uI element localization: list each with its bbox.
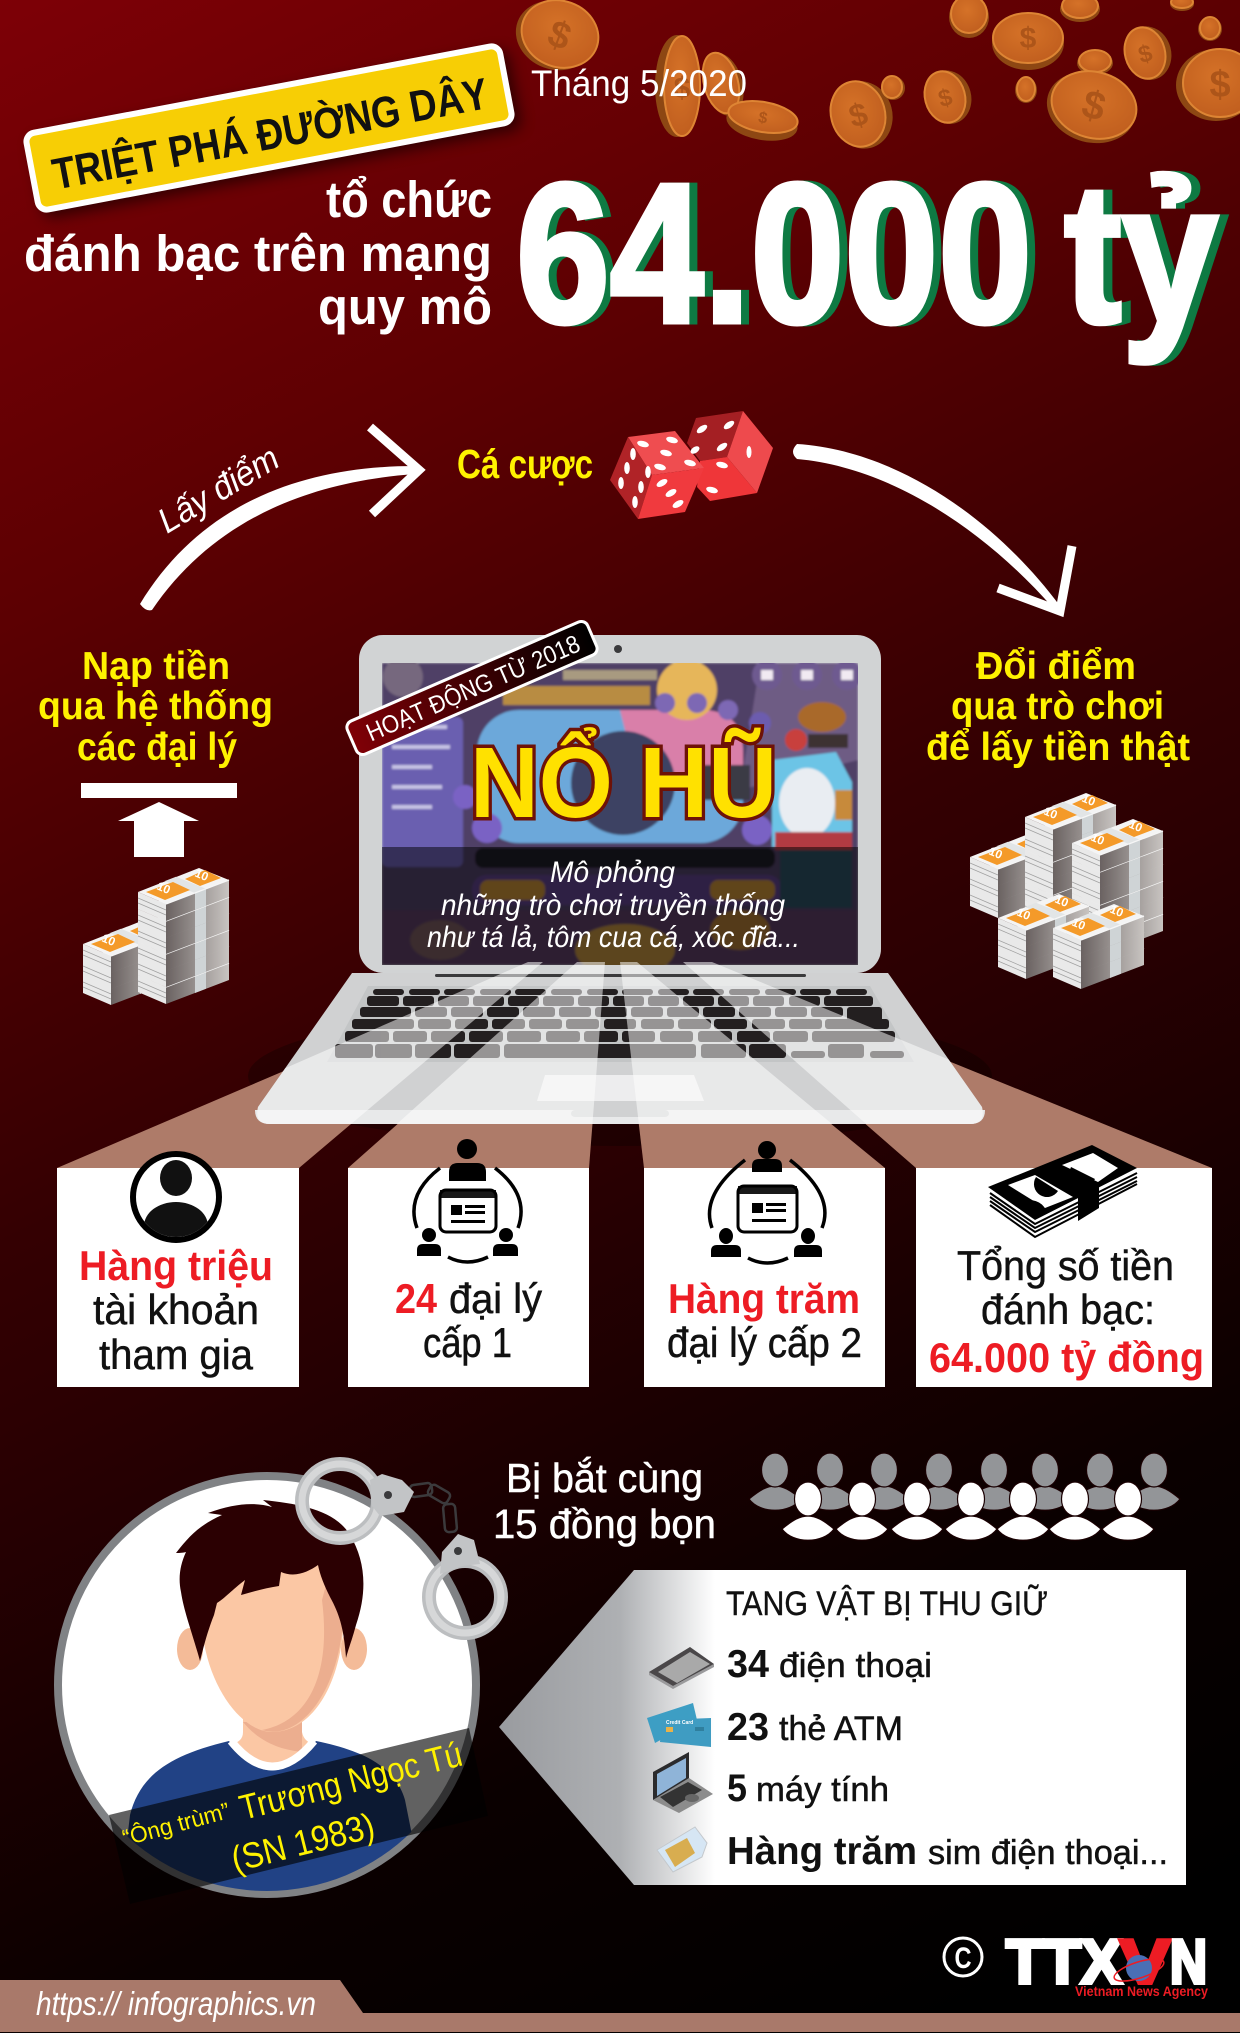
text: deposit step: qua hệ thống [38, 685, 273, 728]
panel: seized items [499, 1570, 1186, 1885]
label: Lấy điểm: Lấy điểm [151, 438, 286, 541]
falling coins: $ [674, 72, 691, 105]
logo: TTXVN: TTX [1006, 1928, 1122, 1997]
collar [231, 1741, 314, 1766]
date: Tháng 5/2020 [531, 63, 747, 104]
light beams to panels [57, 965, 1212, 1168]
panel: level 1 agents [348, 1139, 589, 1387]
falling coins: $ [1135, 40, 1156, 69]
panel: accounts: Hàng triệu [79, 1242, 273, 1289]
icon: ATM cards: Credit Card [666, 1720, 693, 1726]
footer band [0, 1980, 1240, 2032]
icon: money stack right [970, 791, 1163, 989]
laptop [255, 635, 985, 1124]
headline subtitle [24, 171, 492, 335]
panel: total money: đánh bạc: [981, 1286, 1155, 1333]
big figure: 64.000 tỷ: tỷ [1064, 143, 1218, 365]
name caption: Trương Ngọc Tú [236, 1735, 466, 1828]
big figure: 64.000 tỷ: 64.000 [524, 143, 1040, 365]
icon: money stack right: 10 [1108, 902, 1126, 920]
headline subtitle: quy mô [318, 278, 492, 335]
item: computers: máy tính [756, 1771, 889, 1809]
arrow: bet to cash out [793, 444, 1072, 611]
text: accomplices [493, 1455, 716, 1547]
falling coins: $ [1077, 82, 1110, 130]
logo: TTXVN: V [1120, 1928, 1170, 1997]
caption on screen [427, 856, 800, 954]
game screen [382, 657, 862, 976]
name band [109, 1728, 488, 1904]
name caption: “Ông trùm” [119, 1796, 233, 1851]
laptop base [257, 973, 983, 1124]
falling coins: $ [757, 109, 769, 128]
item: SIM cards: Hàng trăm [727, 1830, 917, 1873]
panel: level 2 agents [644, 1141, 885, 1387]
item: phones: 34 [727, 1643, 769, 1686]
screen beams over lid and base [258, 962, 982, 1124]
falling coins: $ [1020, 22, 1037, 55]
icon: money stack right: 10 [1070, 915, 1088, 933]
caption on screen: những trò chơi truyền thống [441, 889, 785, 922]
icon: money stack right: 10 [1042, 804, 1060, 822]
name caption: (SN 1983) [227, 1805, 379, 1880]
falling coins: $ [542, 13, 576, 59]
laptop shadow [248, 1006, 992, 1146]
big figure: 64.000 tỷ: 64.000 [516, 143, 1032, 365]
icon: money stack right: 10 [987, 844, 1005, 862]
panel heading: TANG VẬT BỊ THU GIỮ [726, 1585, 1048, 1623]
icon: money stack right: 10 [1089, 830, 1107, 848]
falling coins: $ [845, 95, 872, 135]
icon: cash pile [988, 1145, 1137, 1238]
panel: accounts: tham gia [99, 1331, 254, 1378]
footer url: https:// infographics.vn [36, 1985, 316, 2022]
text: cash-out step: qua trò chơi [951, 685, 1164, 728]
icon: money stack left [83, 866, 229, 1005]
icon: money stack left: 10 [193, 866, 211, 884]
caption on screen: như tá lả, tôm cua cá, xóc đĩa... [427, 921, 800, 954]
icon: money stack right: 10 [1127, 817, 1145, 835]
falling coins: $ [935, 84, 956, 113]
headline banner: TRIỆT PHÁ ĐƯỜNG DÂY [48, 68, 492, 199]
keyboard well [327, 986, 914, 1062]
item: ATM cards [727, 1706, 903, 1749]
item: SIM cards: sim điện thoại... [928, 1834, 1168, 1872]
headline subtitle: đánh bạc trên mạng [24, 225, 492, 282]
logo: TTXVN: C [954, 1942, 972, 1975]
icon: money stack left: 10 [100, 931, 118, 949]
panel: level 2 agents: Hàng trăm [668, 1275, 860, 1322]
panel: level 1 agents: cấp 1 [423, 1319, 512, 1366]
item: computers: 5 [727, 1767, 747, 1810]
panel: total money [916, 1145, 1212, 1387]
label: Cá cược: Cá cược [457, 441, 593, 487]
logo: TTXVN: N [1170, 1928, 1207, 1997]
arrow: deposit to bet [140, 427, 419, 610]
portrait: ringleader [58, 1476, 488, 1904]
text: deposit step: Nạp tiền [82, 645, 230, 688]
falling coins [506, 0, 1240, 156]
icon: 15 accomplices [749, 1453, 1180, 1540]
icon: agent network [709, 1141, 825, 1263]
item: phones: điện thoại [779, 1647, 932, 1685]
laptop lid [359, 635, 881, 973]
panel: level 1 agents: 24 [395, 1275, 438, 1322]
text: accomplices: Bị bắt cùng [506, 1455, 703, 1501]
trackpad [537, 1075, 704, 1101]
headline subtitle: tổ chức [326, 171, 492, 228]
icon: agent network [414, 1139, 521, 1262]
item: ATM cards: thẻ ATM [779, 1710, 903, 1748]
caption overlay [382, 847, 858, 965]
item: ATM cards: 23 [727, 1706, 769, 1749]
item: SIM cards [727, 1830, 1168, 1873]
shirt [128, 1741, 412, 1891]
logo: TTXVN: Vietnam News Agency [1075, 1983, 1208, 1999]
neck [237, 1719, 308, 1762]
text: deposit step [38, 645, 273, 769]
text: accomplices: 15 đồng bọn [493, 1501, 716, 1547]
item: phones [727, 1643, 932, 1686]
panel: accounts: tài khoản [93, 1286, 259, 1333]
icon: money stack right: 10 [1080, 791, 1098, 809]
title on screen: NỔ HŨ: NỔ HŨ [470, 727, 777, 839]
falling coins: $ [1209, 64, 1231, 106]
icon: dice [610, 411, 773, 519]
text: cash-out step [926, 645, 1190, 769]
icon: handcuffs [302, 1464, 501, 1633]
icon: money stack right: 10 [1015, 905, 1033, 923]
panel: total money: Tổng số tiền [957, 1242, 1174, 1289]
icon: ATM cards [647, 1703, 711, 1747]
icon: phone [649, 1647, 714, 1689]
logo: TTXVN [944, 1928, 1208, 1999]
text: cash-out step: để lấy tiền thật [926, 726, 1190, 769]
text: deposit step: các đại lý [77, 726, 237, 769]
panel: total money: 64.000 tỷ đồng [929, 1334, 1204, 1381]
panel: accounts [57, 1154, 299, 1387]
icon: money stack left: 10 [155, 879, 173, 897]
panel: level 1 agents: đại lý [449, 1275, 542, 1322]
face [204, 1565, 343, 1732]
icon: laptop [653, 1752, 713, 1813]
hair [176, 1500, 363, 1661]
icon: user [133, 1154, 219, 1250]
icon: SIM card [657, 1827, 707, 1872]
keyboard keys [335, 989, 904, 1058]
text: cash-out step: Đổi điểm [976, 645, 1136, 688]
icon: deposit arrow into bar [81, 783, 237, 857]
name caption [119, 1735, 466, 1880]
ears [177, 1628, 203, 1670]
badge: active since 2018: HOẠT ĐỘNG TỪ 2018 [362, 629, 584, 747]
panel: level 2 agents: đại lý cấp 2 [667, 1319, 862, 1366]
icon: money stack right: 10 [1053, 892, 1071, 910]
caption on screen: Mô phỏng [550, 856, 675, 889]
